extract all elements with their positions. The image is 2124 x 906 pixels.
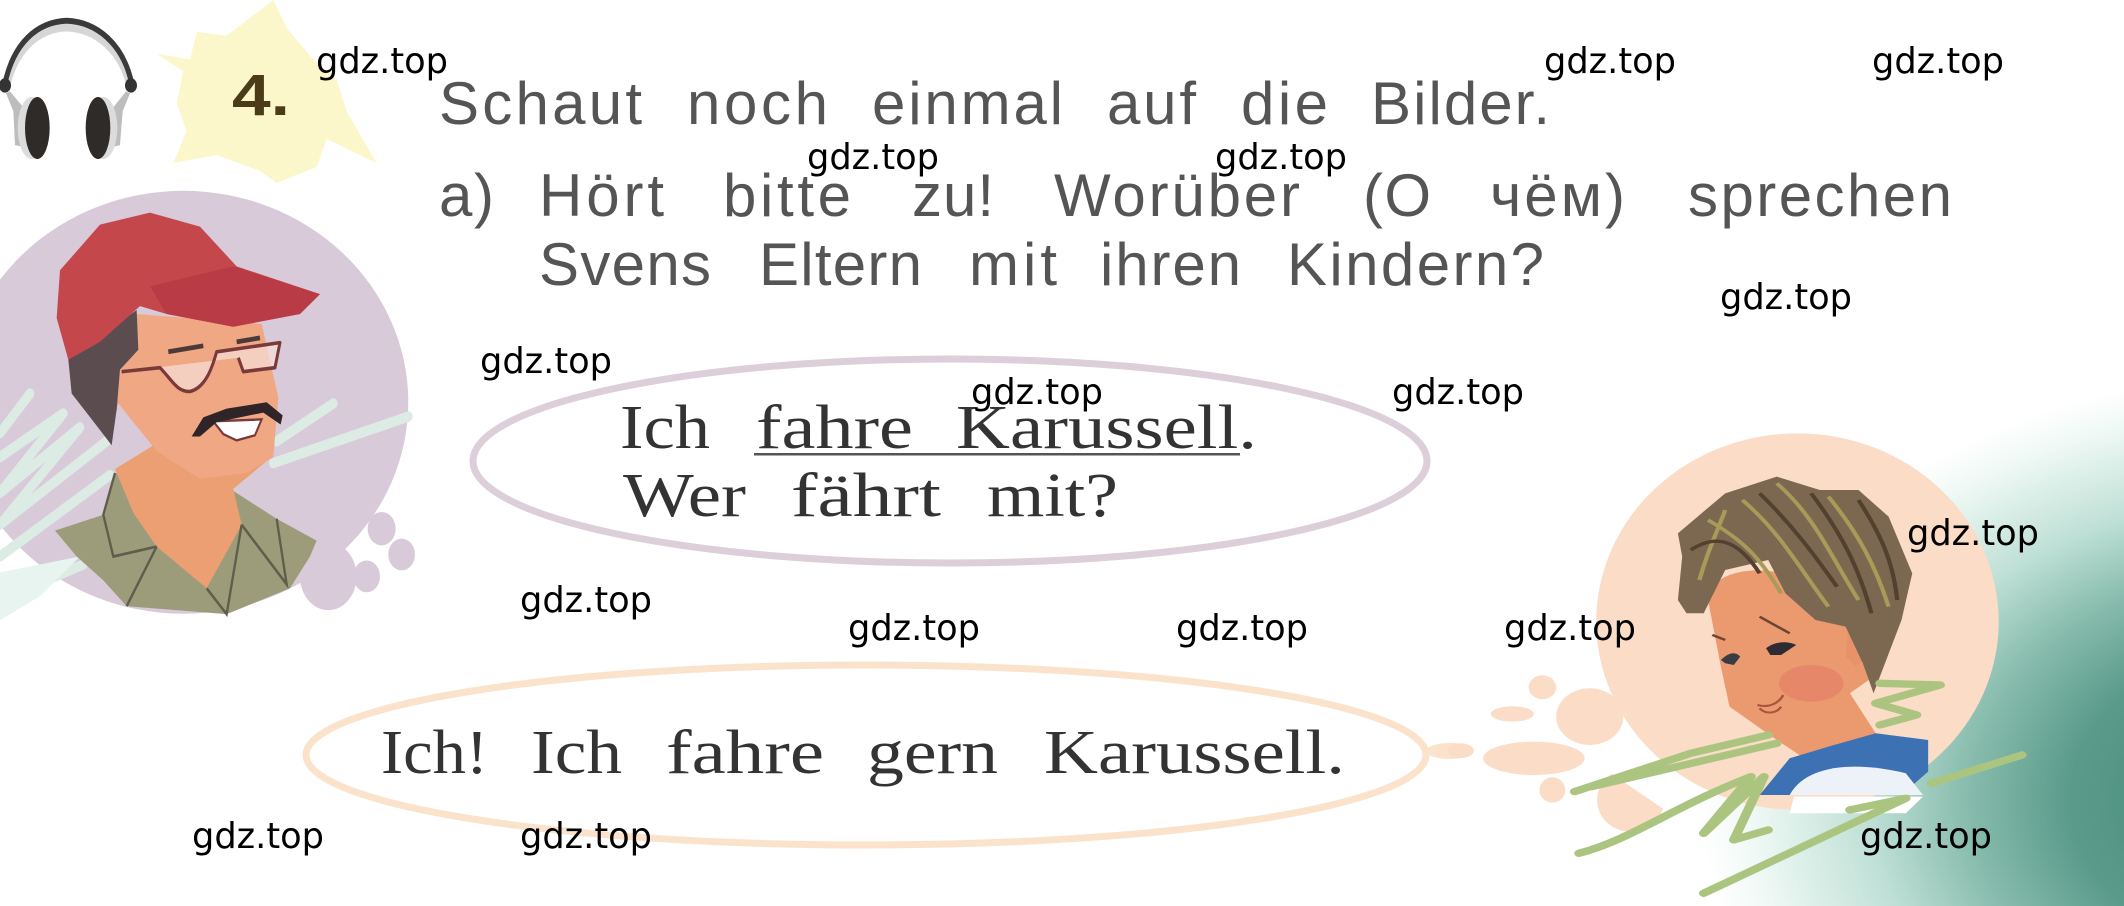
line: Schaut noch einmal: Schaut: [439, 70, 642, 137]
speech bubble: boy: Ich: [531, 719, 622, 787]
line: Svens Eltern: ihren: [1100, 231, 1241, 298]
line: a) Hört bitte zu: Hört: [539, 162, 664, 229]
watermarks: gdz.top: [971, 372, 1103, 413]
line: Svens Eltern: mit: [969, 231, 1057, 298]
illustration: boy: [1448, 433, 2022, 893]
watermarks: gdz.top: [1860, 816, 1992, 857]
line: a) Hört bitte zu: zu!: [912, 162, 994, 229]
speech bubble: boy: Ich!: [381, 719, 488, 787]
speech bubble: man: Wer: [623, 462, 746, 530]
line: Svens Eltern: [539, 231, 1544, 298]
watermarks: gdz.top: [1907, 513, 2039, 554]
watermarks: gdz.top: [1392, 372, 1524, 413]
line: a) Hört bitte zu: Worüber: [1054, 162, 1300, 229]
line: Schaut noch einmal: Bilder.: [1371, 70, 1550, 137]
speech bubble: boy: gern: [867, 719, 998, 787]
speech bubble: man: fahre: [756, 394, 913, 462]
line: a) Hört bitte zu: чём): [1490, 162, 1625, 229]
speech bubble: man: [473, 359, 1427, 563]
watermarks: gdz.top: [1872, 41, 2004, 82]
line: a) Hört bitte zu: [439, 162, 1952, 229]
speech bubble: man: fährt: [791, 462, 941, 530]
speech bubble: man: Karussell.: [956, 394, 1257, 462]
teal corner wash: [1690, 360, 2124, 906]
line: a) Hört bitte zu: sprechen: [1688, 162, 1952, 229]
speech bubble: man: Ich: [620, 394, 710, 462]
line: a) Hört bitte zu: (O: [1363, 162, 1431, 229]
exercise number: 4.: [232, 63, 290, 128]
line: a) Hört bitte zu: bitte: [723, 162, 851, 229]
icon: headphones: [0, 21, 137, 159]
line: Svens Eltern: Eltern: [759, 231, 922, 298]
watermarks: gdz.top: [316, 41, 448, 82]
watermarks: gdz.top: [1215, 137, 1347, 178]
watermarks: gdz.top: [520, 580, 652, 621]
watermarks: gdz.top: [1544, 41, 1676, 82]
watermarks: [192, 41, 2039, 857]
line: Schaut noch einmal: die: [1241, 70, 1328, 137]
speech bubble: boy: [306, 665, 1474, 845]
watermarks: gdz.top: [1720, 277, 1852, 318]
speech bubble: boy: Karussell.: [1044, 719, 1345, 787]
line: Svens Eltern: Kindern?: [1287, 231, 1544, 298]
watermarks: gdz.top: [520, 816, 652, 857]
line: a) Hört bitte zu: a): [439, 162, 494, 229]
instruction text: [439, 70, 1952, 298]
illustration: man with red cap: [0, 191, 415, 620]
speech bubble: boy: fahre: [666, 719, 824, 787]
watermarks: gdz.top: [1176, 608, 1308, 649]
line: Schaut noch einmal: noch: [687, 70, 828, 137]
watermarks: gdz.top: [1504, 608, 1636, 649]
watermarks: gdz.top: [848, 608, 980, 649]
watermarks: gdz.top: [480, 341, 612, 382]
watermarks: gdz.top: [807, 137, 939, 178]
line: Schaut noch einmal: auf: [1107, 70, 1196, 137]
line: Schaut noch einmal: [439, 70, 1550, 137]
speech bubble: man: mit?: [987, 462, 1118, 530]
yellow star burst: [157, 0, 377, 183]
line: Schaut noch einmal: einmal: [872, 70, 1063, 137]
watermarks: gdz.top: [192, 816, 324, 857]
line: Svens Eltern: Svens: [539, 231, 711, 298]
